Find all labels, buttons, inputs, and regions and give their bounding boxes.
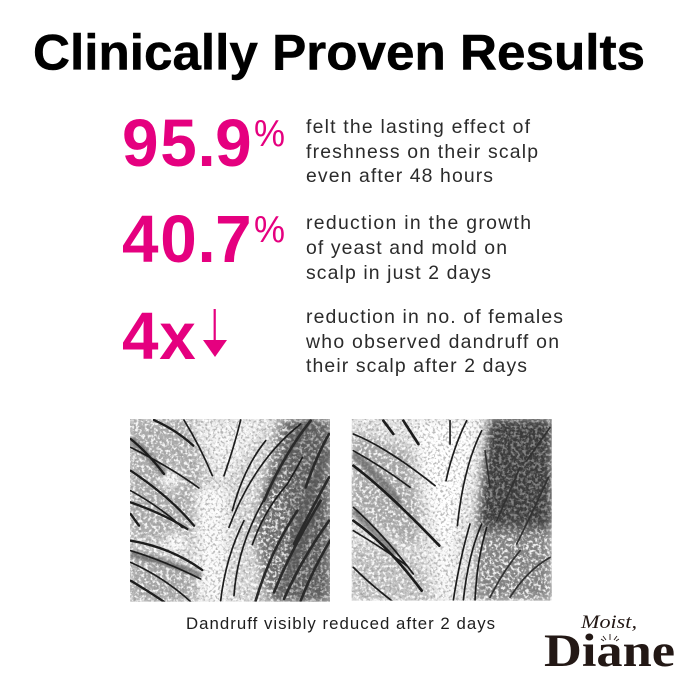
- icon: down arrow: [203, 309, 227, 357]
- title: Clinically Proven Results: [33, 24, 645, 80]
- stat description: freshness: even after 48 hours: [306, 165, 493, 187]
- logo: Moist Diane: Moist,: [580, 612, 637, 633]
- stat description: yeast and mold: of yeast and mold on: [306, 237, 507, 259]
- caption: Dandruff visibly reduced after 2 days: [186, 614, 495, 633]
- stat description: freshness: felt the lasting effect of: [306, 116, 531, 138]
- photo: scalp before: [130, 419, 330, 602]
- stat description: freshness: [306, 116, 538, 187]
- stat description: yeast and mold: [306, 212, 531, 284]
- stat value: 4x: 4x: [122, 299, 196, 374]
- stat row: 40.7%: [122, 202, 531, 284]
- stat description: yeast and mold: reduction in the growth: [306, 212, 531, 234]
- stat description: dandruff: reduction in no. of females: [306, 306, 563, 328]
- stat description: freshness: freshness on their scalp: [306, 141, 538, 163]
- stat value: 40.7%: %: [254, 209, 285, 251]
- stat description: dandruff: who observed dandruff on: [305, 331, 559, 353]
- stat row: 95.9%: [122, 106, 538, 187]
- stat value: 95.9%: %: [254, 113, 285, 155]
- stat description: yeast and mold: scalp in just 2 days: [306, 262, 491, 284]
- stat description: dandruff: [305, 306, 563, 377]
- photo: scalp after: [352, 419, 552, 601]
- stat value: 40.7%: 40.7: [122, 202, 252, 277]
- logo: Moist Diane: Diane: [544, 625, 675, 677]
- stat row: 4x down: [122, 299, 563, 377]
- stat value: 95.9%: 95.9: [122, 106, 252, 181]
- icon: sparkle over a: [601, 634, 619, 641]
- stat description: dandruff: their scalp after 2 days: [306, 355, 527, 377]
